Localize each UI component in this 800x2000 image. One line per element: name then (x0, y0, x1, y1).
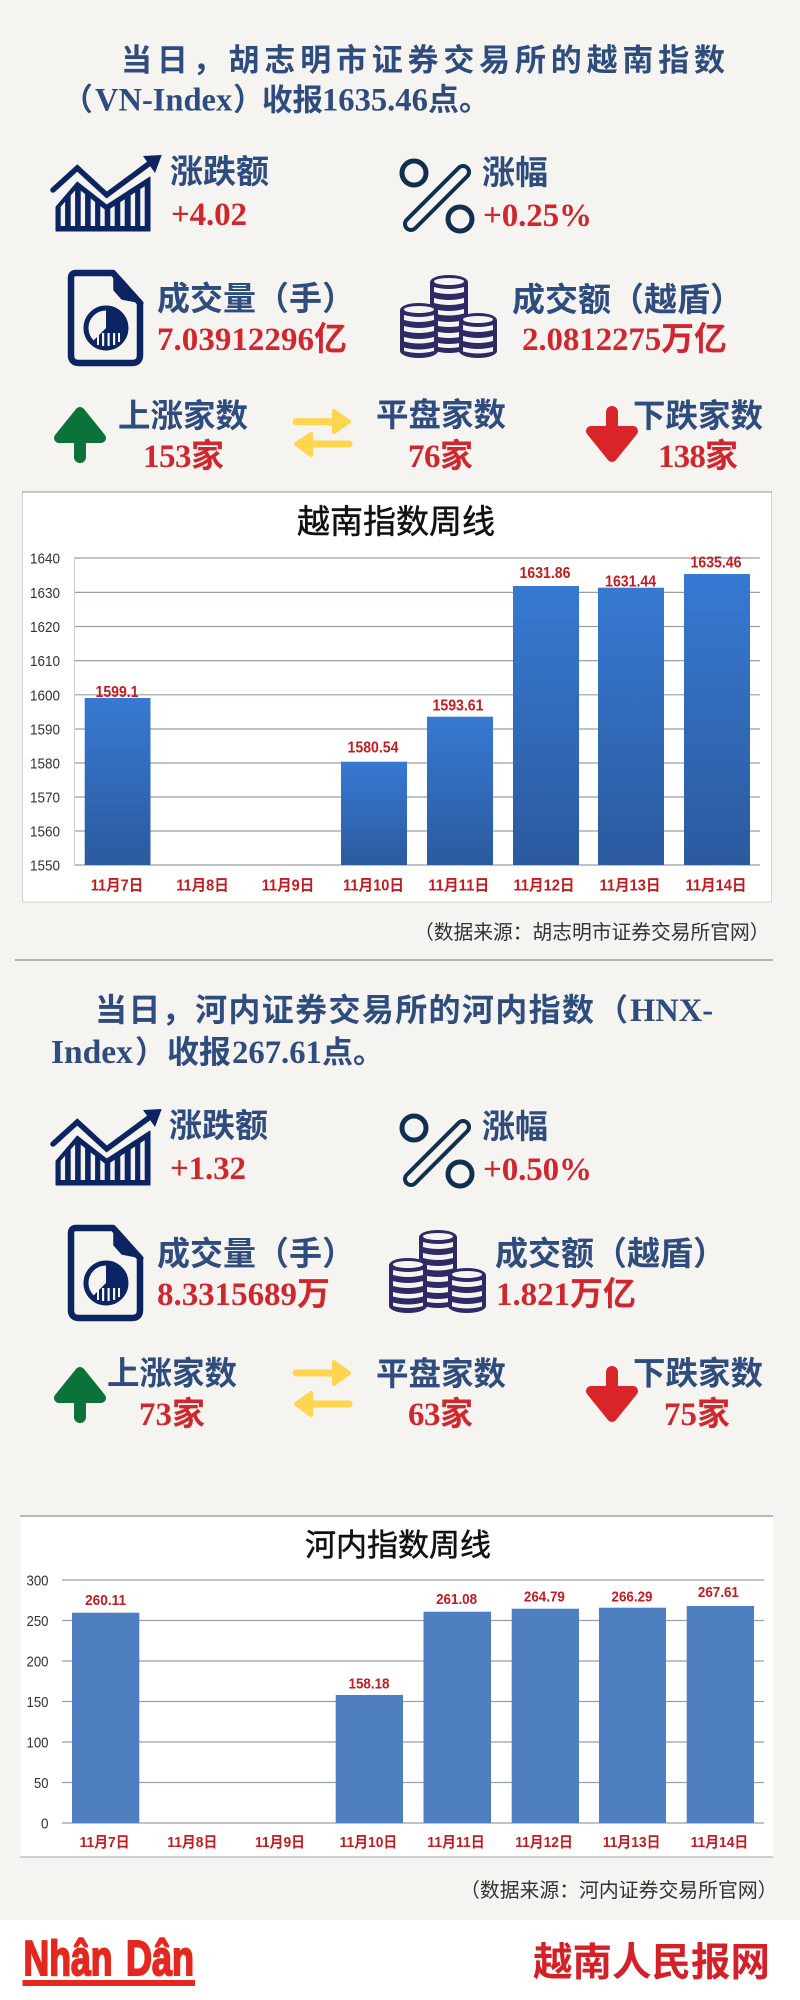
bar chart: 1600 (30, 687, 60, 704)
stat: volume (157, 1236, 355, 1313)
bar chart: 260.11 (85, 1592, 126, 1609)
chart title: 河内指数周线 (305, 1528, 491, 1563)
bar chart: 1610 (30, 653, 60, 670)
stat: volume: 成交量（手） (157, 1236, 355, 1273)
stat: advancers: 上涨家数 (118, 398, 248, 435)
bar chart: 11月8日 (167, 1835, 217, 1851)
stat: advancers: 153家 (143, 438, 224, 475)
stat: percent change (482, 155, 592, 234)
bar chart: 1550 (30, 858, 60, 874)
stat: decliners: 下跌家数 (633, 398, 763, 435)
heading: HNX-Index: （ (597, 993, 628, 1028)
bar chart: 1593.61 (432, 698, 484, 714)
bar chart: 11月7日 (80, 1835, 130, 1851)
bar chart: 11月12日 (515, 1835, 573, 1851)
icon: green up arrow (59, 1372, 101, 1417)
heading: VN-Index: VN-Index (95, 82, 233, 118)
stat: turnover (495, 1236, 726, 1313)
bar chart: 1599.1 (96, 684, 139, 701)
bar chart (30, 550, 760, 894)
stat: unchanged (376, 397, 506, 475)
stat: percent change: 涨幅 (482, 1109, 548, 1146)
stat: volume: 8.3315689万 (157, 1277, 330, 1313)
heading: VN-Index: 1635.46 (322, 82, 428, 118)
bar chart: 1570 (30, 790, 60, 806)
stat: price change: 涨跌额 (169, 1108, 268, 1145)
stat: decliners: 75家 (664, 1396, 730, 1433)
icon: percent (402, 1116, 472, 1186)
chart panel: VN-Index weekly (22, 492, 772, 902)
stat: unchanged (376, 1356, 506, 1433)
bar chart: 1640 (30, 550, 60, 568)
stat: turnover: 2.0812275万亿 (522, 321, 727, 358)
bar chart: 11月14日 (691, 1835, 748, 1851)
stat: price change: +1.32 (170, 1151, 246, 1187)
bar chart: 50 (34, 1775, 48, 1792)
brand name: 越南人民报网 (533, 1941, 770, 1985)
bar chart: 11月13日 (600, 878, 660, 894)
stat: volume: 7.03912296亿 (157, 321, 347, 358)
stat: price change (170, 154, 269, 233)
icon: coin stacks (389, 1230, 486, 1313)
heading: HNX-Index (51, 992, 713, 1071)
bar chart: 11月11日 (428, 878, 489, 894)
stat: advancers (107, 1356, 237, 1433)
bar chart: 11月8日 (176, 878, 229, 894)
bar chart: 300 (26, 1572, 48, 1590)
stat: unchanged: 76家 (408, 438, 473, 475)
bar chart: 11月9日 (255, 1835, 305, 1851)
heading: VN-Index (62, 43, 725, 118)
bar chart: 150 (26, 1694, 48, 1711)
icon: rising chart (53, 1109, 162, 1185)
heading: HNX-Index: 267.61 (232, 1035, 322, 1071)
icon: green up arrow (59, 412, 101, 457)
stat: decliners (633, 398, 763, 475)
heading: VN-Index: 收报 (262, 84, 323, 118)
icon: red down arrow (591, 1372, 633, 1417)
stat: volume: 成交量（手） (157, 281, 355, 318)
icon: yellow swap arrows (296, 411, 349, 455)
heading: HNX-Index: 点。 (322, 1035, 384, 1070)
stat: volume (157, 281, 355, 358)
icon: percent (402, 161, 472, 231)
chart title: 越南指数周线 (297, 503, 495, 540)
bar chart: 1631.86 (520, 565, 571, 582)
section: HNX-Index (20, 992, 778, 1902)
stat: percent change: +0.50% (483, 1152, 592, 1188)
section: VN-Index (22, 43, 772, 944)
stat: percent change (482, 1109, 592, 1188)
bar chart: 1560 (30, 824, 60, 840)
icon: coin stacks (400, 275, 497, 358)
bar chart: 158.18 (348, 1675, 390, 1692)
stat: percent change: +0.25% (483, 198, 592, 234)
stat: turnover: 成交额（越盾） (512, 282, 743, 319)
bar chart: 1590 (30, 722, 60, 738)
bar chart: 200 (26, 1654, 48, 1670)
bar chart: 1635.46 (690, 554, 742, 572)
stat: turnover: 成交额（越盾） (495, 1236, 726, 1273)
bar chart (26, 1572, 764, 1851)
footer band (0, 1920, 800, 2000)
bar chart: 11月14日 (686, 878, 746, 894)
stat: price change: +4.02 (171, 197, 247, 233)
stat: unchanged: 63家 (408, 1396, 473, 1433)
heading: HNX-Index: ） (135, 1035, 166, 1070)
heading: VN-Index: 当日，胡志明市证券交易所的越南指数 (121, 43, 725, 78)
heading: HNX-Index: 当日，河内证券交易所的河内指数 (95, 992, 594, 1028)
stat: unchanged: 平盘家数 (376, 1356, 506, 1393)
stat: unchanged: 平盘家数 (376, 397, 506, 434)
bar chart: 100 (26, 1734, 48, 1752)
bar chart: 1620 (30, 619, 60, 636)
heading: VN-Index: 点。 (428, 82, 490, 118)
stat: percent change: 涨幅 (482, 155, 548, 192)
bar chart: 250 (26, 1613, 48, 1630)
stat: turnover (512, 282, 743, 358)
heading: VN-Index: ） (233, 82, 264, 118)
bar chart: 261.08 (436, 1591, 477, 1608)
stat: decliners (633, 1356, 763, 1433)
icon: red down arrow (591, 412, 633, 457)
bar chart: 1580.54 (348, 740, 399, 756)
bar chart: 266.29 (612, 1589, 652, 1606)
bar chart: 1631.44 (605, 574, 656, 590)
icon: document with pie chart (71, 1227, 143, 1318)
bar chart: 267.61 (698, 1584, 739, 1601)
stat: price change: 涨跌额 (170, 154, 269, 191)
stat: turnover: 1.821万亿 (496, 1276, 636, 1313)
source note: （数据来源：胡志明市证券交易所官网） (414, 922, 770, 944)
stat: advancers: 73家 (139, 1396, 205, 1433)
bar chart: 11月9日 (262, 878, 314, 894)
heading: HNX-Index: 收报 (167, 1034, 231, 1070)
stat: price change (169, 1108, 268, 1187)
icon: rising chart (53, 155, 162, 231)
bar chart: 0 (41, 1816, 48, 1832)
heading: HNX-Index: HNX- (630, 993, 713, 1029)
bar chart: 1630 (30, 585, 60, 602)
stat: decliners: 138家 (658, 438, 738, 475)
logo: Nhan Dan: Dân (126, 1932, 194, 1986)
stat: decliners: 下跌家数 (633, 1356, 763, 1392)
bar chart: 264.79 (524, 1588, 565, 1605)
heading: VN-Index: （ (62, 82, 93, 118)
source note: （数据来源：河内证券交易所官网） (460, 1880, 778, 1902)
bar chart: 11月10日 (340, 1835, 397, 1851)
bar chart: 1580 (30, 756, 60, 772)
heading: HNX-Index: Index (51, 1034, 133, 1071)
logo: Nhan Dan: Nhân (24, 1932, 112, 1986)
bar chart: 11月13日 (603, 1835, 660, 1851)
bar chart: 11月10日 (343, 878, 404, 894)
bar chart: 11月11日 (427, 1835, 485, 1851)
icon: yellow swap arrows (296, 1362, 349, 1415)
bar chart: 11月12日 (514, 878, 574, 894)
icon: document with pie chart (71, 272, 143, 363)
stat: advancers: 上涨家数 (107, 1356, 237, 1392)
bar chart: 11月7日 (91, 878, 143, 894)
stat: advancers (118, 398, 248, 475)
chart panel: HNX-Index weekly (20, 1516, 773, 1857)
